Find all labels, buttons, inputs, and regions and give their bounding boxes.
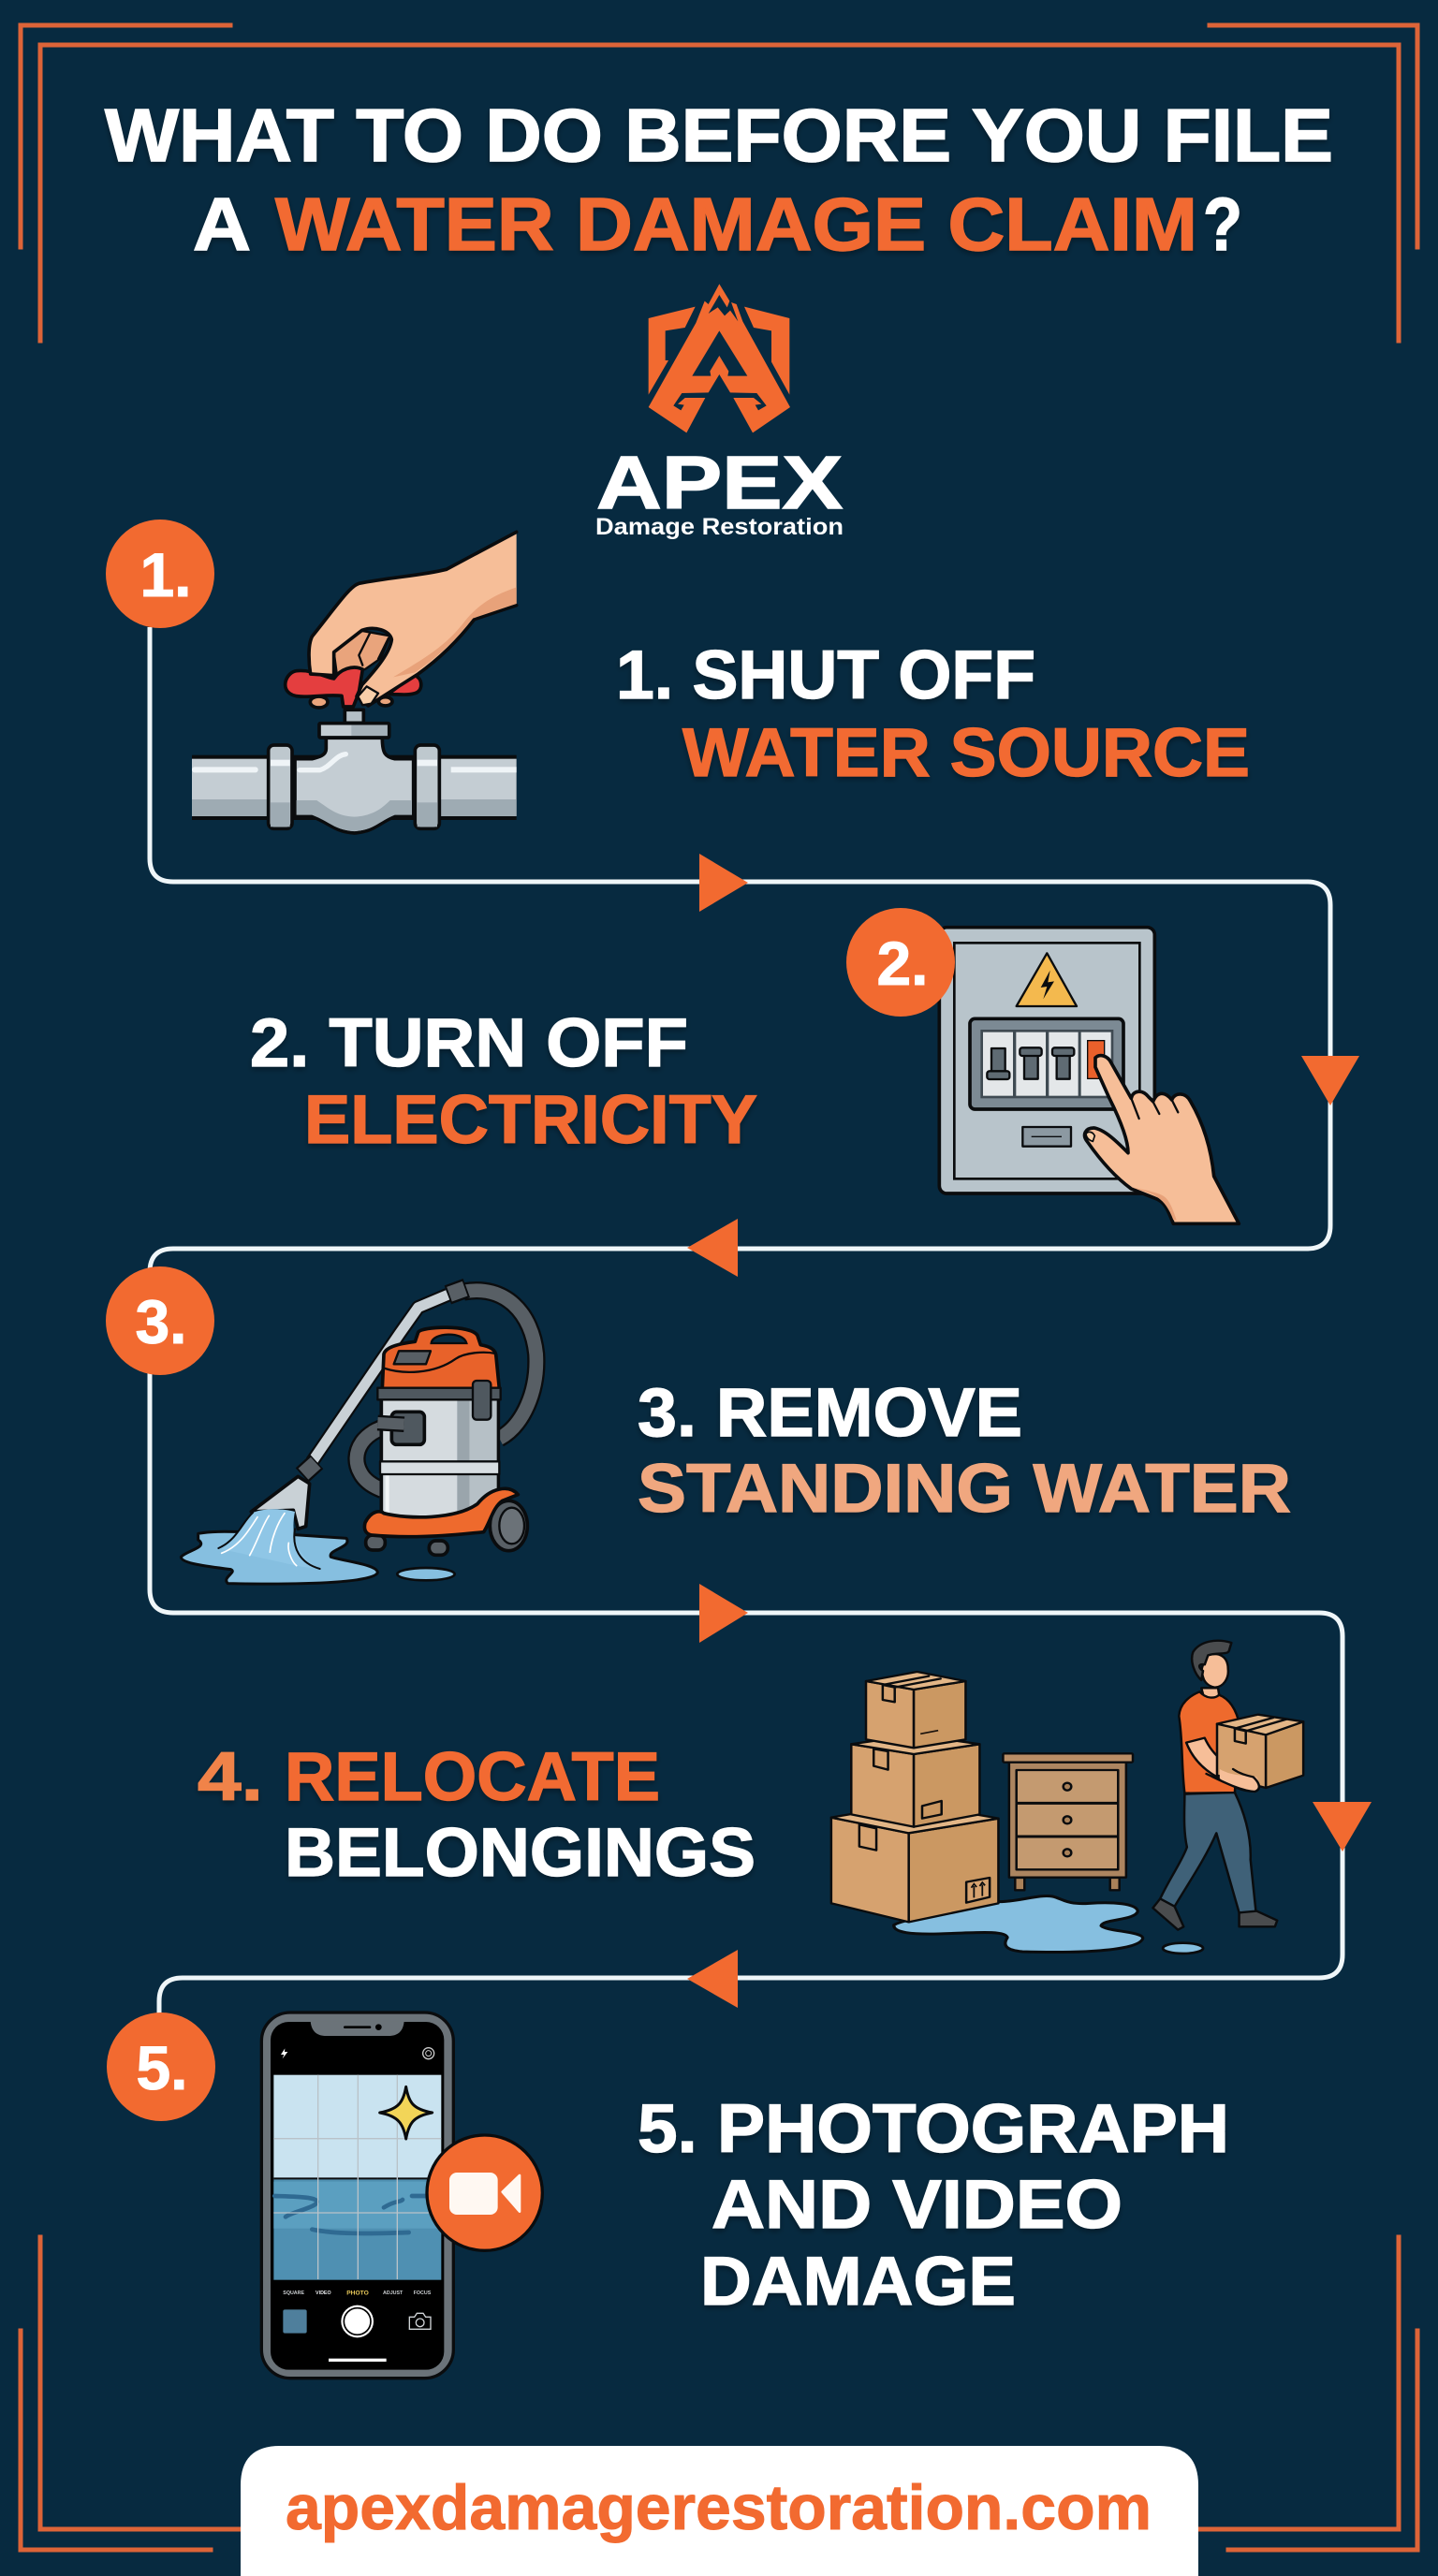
dresser xyxy=(1003,1753,1133,1890)
person carrying box xyxy=(1152,1641,1303,1930)
arrow: step 4 to 5 xyxy=(687,1950,738,2008)
step 4 heading: BELONGINGS xyxy=(285,1815,756,1891)
arrow: step 2 to 3 xyxy=(687,1219,738,1277)
step 2 heading: 2. TURN OFF xyxy=(250,1005,688,1081)
arrow: step 1 to 2 xyxy=(699,854,748,912)
connector path xyxy=(150,627,1343,2022)
step 2 heading xyxy=(250,1005,757,1158)
badge: 5: 5. xyxy=(136,2033,188,2102)
step 5 heading xyxy=(638,2091,1229,2320)
step 3 heading xyxy=(638,1375,1291,1527)
icon: phone camera with video badge: SQUARE xyxy=(283,2291,305,2296)
icon: phone camera with video badge: FOCUS xyxy=(414,2291,432,2296)
step 5 heading: DAMAGE xyxy=(700,2244,1016,2320)
icon: phone camera with video badge: PHOTO xyxy=(346,2291,369,2297)
badge: 2 xyxy=(846,908,955,1017)
step 3 heading: 3. REMOVE xyxy=(638,1375,1022,1451)
bottom decorative frame xyxy=(21,2237,1417,2550)
badge: 5 xyxy=(107,2012,215,2121)
icon: breaker panel with hand xyxy=(939,928,1239,1223)
logo wordmark: APEX xyxy=(596,441,843,524)
logo tagline: Damage Restoration xyxy=(595,514,844,540)
panel: step 4 xyxy=(198,1641,1303,1954)
panel: step 5 xyxy=(107,2012,1229,2378)
stacked boxes xyxy=(831,1672,998,1922)
step 4 heading: RELOCATE xyxy=(285,1739,660,1815)
badge: 1: 1. xyxy=(139,540,192,609)
logo mark xyxy=(649,284,790,432)
step 2 heading: ELECTRICITY xyxy=(304,1082,757,1158)
arrow: step 3 to 4 xyxy=(699,1584,748,1643)
badge: 2: 2. xyxy=(876,929,929,998)
title: A xyxy=(193,183,251,266)
title: WHAT TO DO BEFORE YOU FILE xyxy=(105,94,1333,177)
badge: 1 xyxy=(106,520,214,628)
website footer pill xyxy=(241,2446,1198,2576)
panel: step 3 xyxy=(106,1266,1291,1584)
step 1 heading: WATER SOURCE xyxy=(682,715,1250,791)
badge: 3: 3. xyxy=(135,1287,187,1356)
top decorative frame xyxy=(21,25,1417,341)
icon: phone camera with video badge xyxy=(261,2012,542,2378)
title: ? xyxy=(1203,183,1242,266)
website footer pill: apexdamagerestoration.com xyxy=(286,2472,1152,2543)
step 5 heading: AND VIDEO xyxy=(712,2167,1123,2243)
title: WATER DAMAGE CLAIM xyxy=(275,183,1197,266)
step 1 heading: 1. SHUT OFF xyxy=(616,637,1035,713)
icon: phone camera with video badge: ADJUST xyxy=(383,2291,404,2296)
panel: step 1 xyxy=(106,520,1250,833)
icon: phone camera with video badge: VIDEO xyxy=(315,2291,331,2296)
arrow: step 4 down xyxy=(1313,1802,1372,1852)
step 3 heading: STANDING WATER xyxy=(638,1451,1291,1527)
arrow: step 2 down xyxy=(1301,1056,1359,1105)
logo xyxy=(595,284,844,540)
step 1 heading xyxy=(616,637,1250,791)
step 5 heading: 5. PHOTOGRAPH xyxy=(638,2091,1229,2167)
title xyxy=(105,94,1333,266)
icon: moving boxes, dresser and person xyxy=(831,1641,1303,1954)
badge: 3 xyxy=(106,1266,214,1375)
step 4 heading: 4. xyxy=(198,1739,263,1815)
panel: step 2 xyxy=(250,908,1239,1223)
icon: hand closing pipe valve xyxy=(192,532,517,833)
icon: wet vacuum xyxy=(181,1288,536,1584)
step 4 heading xyxy=(198,1739,756,1891)
